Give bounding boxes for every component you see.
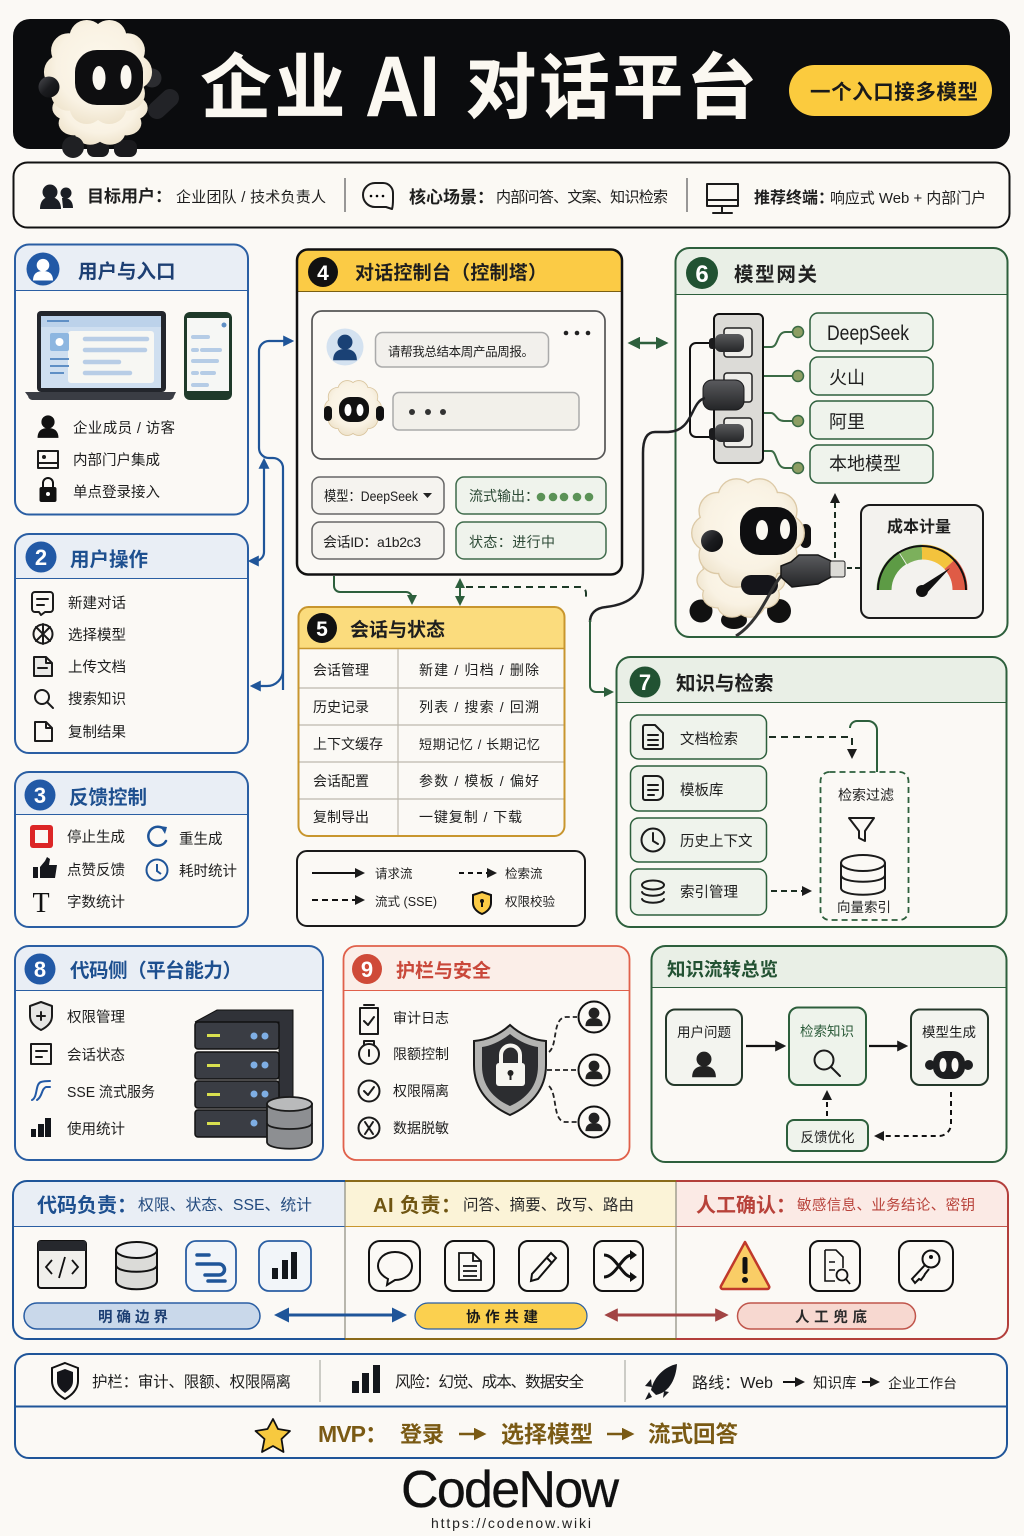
connectors: console to session [334,576,586,604]
subtitle pill: 一个入口接多模型 [810,81,978,104]
capability list [30,1002,155,1138]
icon: shield [473,892,491,914]
panel 3: feedback controls: 字数统计 [67,894,125,911]
icon: session state [31,1044,51,1064]
panel 3: feedback controls [15,772,248,927]
arrow: blue [277,1314,404,1316]
heading: 知识流转总览 [667,959,778,980]
legend: 权限校验 [505,894,556,909]
column headings: 人工确认： [696,1194,796,1217]
chip: streaming: 流式输出： [469,488,539,504]
safety list: 权限隔离 [393,1083,449,1099]
badge 2 [26,542,56,572]
panel 4: chat console [297,249,622,574]
safety list: 限额控制 [393,1046,449,1062]
panel 3: feedback controls: 重生成 [179,831,222,848]
cost gauge: 成本计量 [887,517,951,536]
badge 9 [352,954,382,984]
badge 9: 9 [361,957,373,982]
retrieval connectors [769,721,877,891]
table rows: 上下文缓存 [313,736,383,752]
flow arrows [746,1046,951,1136]
safety list: 审计日志 [393,1010,449,1026]
model chips [810,313,933,483]
icon: thumbs up [33,857,57,878]
badge 8: 8 [34,957,46,982]
model connectors [763,332,799,468]
legend: 流式 (SSE) [375,895,437,909]
action list: 选择模型 [68,627,126,644]
target users [87,186,326,206]
icon: user badge [26,252,60,286]
table rows: 参数 / 模板 / 偏好 [419,773,539,789]
column headings: 权限、状态、SSE、统计 [138,1196,312,1214]
title: 对话平台 [466,49,760,127]
box: model generation [911,1010,988,1085]
icon: lock [40,478,56,502]
route: 企业工作台 [888,1375,957,1391]
core scenarios: 核心场景： [409,187,494,207]
retrieval filter box: 检索过滤 [838,787,894,803]
badge 6: 6 [695,261,709,288]
icon: power strip [690,314,763,463]
action list: 复制结果 [68,723,126,741]
route: 知识库 [813,1375,856,1392]
title: AI [365,39,440,135]
chip: status: 状态：进行中 [469,534,555,550]
cable arrow to retrieval [590,620,612,692]
icon: server rack [195,1010,312,1149]
route: 路线：Web [692,1374,773,1392]
capability list: 会话状态 [67,1047,125,1064]
table rows: 列表 / 搜索 / 回溯 [419,699,539,715]
chat window [312,311,605,459]
icon: code window [38,1241,86,1288]
model chips: DeepSeek [827,322,909,345]
icon: star [256,1419,290,1452]
title [201,39,760,135]
icon: users [40,184,73,209]
icon: model select [34,624,52,644]
icon: quota [359,1041,379,1064]
risks: 风险：幻觉、成本、数据安全 [395,1373,584,1391]
icon: template [643,776,663,800]
icon: guard shield [52,1363,78,1399]
assistant message [393,392,579,430]
icon: upload doc [34,657,52,676]
icon: sheep holding plug [690,479,845,636]
heading: 对话控制台（控制塔） [355,261,547,284]
black cable [590,398,705,622]
box: model generation: 模型生成 [922,1025,976,1040]
badge 8 [24,954,56,984]
heading: 用户与入口 [78,260,176,283]
retrieval filter box [820,772,908,920]
icon: users [578,1002,610,1138]
core scenarios [409,187,668,207]
logo: CodeNow: CodeNow [401,1461,619,1519]
icon: document [445,1241,494,1291]
panel: responsibility matrix [13,1181,1008,1339]
chip: session id: 会话ID：a1b2c3 [323,534,421,550]
pill: clear boundary [24,1303,260,1329]
chip: status [456,522,606,559]
column headings: 问答、摘要、改写、路由 [463,1196,634,1214]
connector: panels 1-3 to console [250,341,292,690]
icon: portal [38,451,58,468]
icon: funnel [849,818,874,841]
MVP path: 流式回答 [648,1422,739,1447]
icon: new chat [32,592,53,615]
capability list: SSE 流式服务 [67,1084,155,1101]
action list: 新建对话 [68,595,126,612]
icon: SSE stream [32,1081,50,1100]
table rows: 历史记录 [313,699,369,715]
panel 1: users and entry [15,244,248,514]
badge 6 [686,257,718,289]
heading: 模型网关 [734,263,817,286]
icon: stream [186,1241,236,1291]
panel 2: user actions [15,534,248,753]
knowledge chips: 索引管理 [680,884,738,901]
target users: 目标用户： [87,186,172,206]
icon: document [643,725,663,749]
panel: knowledge flow overview [652,946,1006,1162]
badge 7: 7 [639,670,651,695]
icon: isolation check [358,1080,380,1102]
panel 9: guardrails and security [344,946,630,1160]
badge 2: 2 [35,545,47,570]
legend: 检索流 [505,866,543,881]
URL: https://codenow.wiki [431,1515,591,1531]
icon: monitor [707,184,738,213]
route [692,1374,957,1392]
icon: database [841,855,885,895]
heading: 用户操作 [70,548,148,571]
column headings: 代码负责： [37,1194,137,1217]
action list: 搜索知识 [68,691,126,708]
entry list: 企业成员 / 访客 [73,419,175,437]
badge 4 [308,257,338,287]
knowledge chips: 模板库 [680,781,724,799]
safety list: 数据脱敏 [393,1120,449,1136]
knowledge chips: 文档检索 [680,731,738,748]
badge 3 [24,780,56,810]
icon: sheep avatar [324,381,384,435]
icon: user avatar [326,328,364,366]
icon: chat [363,183,393,209]
dashed connectors [835,495,861,568]
icon: rocket [645,1364,677,1400]
core scenarios: 内部问答、文案、知识检索 [496,188,668,206]
terminals: 响应式 Web + 内部门户 [830,189,986,207]
icon: statistics [259,1241,311,1291]
table rows [313,662,540,825]
box: retrieve knowledge [789,1008,866,1085]
pill: human fallback [738,1303,916,1329]
icon: clock [642,828,664,852]
user message [376,332,548,367]
icon: index [642,880,664,903]
MVP path [318,1421,739,1447]
column headings: 敏感信息、业务结论、密钥 [797,1197,975,1214]
pill: co-build [415,1303,587,1329]
icon: stop [30,825,53,848]
box: user question: 用户问题 [677,1024,731,1040]
panel 3: feedback controls: 耗时统计 [179,863,237,880]
terminals: 推荐终端： [754,189,834,207]
pill: human fallback: 人工兜底 [795,1308,868,1326]
retrieval filter box: 向量索引 [837,900,891,915]
panel: roadmap and MVP [15,1354,1007,1458]
heading: 护栏与安全 [396,959,491,982]
icon: key [899,1241,953,1291]
icon: laptop [25,311,176,400]
box: retrieve knowledge: 检索知识 [800,1023,854,1039]
panel 5: session and state [298,607,564,836]
table rows: 新建 / 归档 / 删除 [419,662,539,678]
icon: shield with lock [474,1025,546,1115]
icon: router shuffle [594,1241,643,1291]
action list [32,592,126,741]
entry list [38,415,175,502]
title banner [13,19,1010,149]
heading: 会话与状态 [350,618,445,641]
MVP path: MVP： [318,1421,388,1447]
panel 3: feedback controls: 点赞反馈 [67,862,125,879]
badge 7 [630,666,660,698]
target users: 企业团队 / 技术负责人 [176,188,326,206]
icon: audit log [360,1005,378,1034]
icon: masking [358,1118,380,1138]
icon: timer [146,860,168,880]
panel 8: code side [15,946,323,1160]
arrow: red [607,1314,726,1316]
icon: risk bars [352,1365,380,1393]
action list: 上传文档 [68,659,126,676]
chip: streaming [456,477,606,514]
entry list: 单点登录接入 [73,484,160,501]
table rows: 会话配置 [313,773,369,789]
box: user question [666,1010,742,1085]
badge 3: 3 [34,783,46,808]
dashed user links [547,1017,578,1122]
icon: warning [721,1242,769,1289]
model chips: 阿里 [829,412,865,432]
heading: 知识与检索 [676,672,774,695]
badge 4: 4 [317,262,329,285]
panel 3: feedback controls: 停止生成 [67,829,125,846]
badge 5: 5 [316,618,328,641]
pill: clear boundary: 明确边界 [98,1309,168,1326]
info bar [14,162,1010,228]
box: feedback: 反馈优化 [800,1130,854,1145]
table rows: 会话管理 [313,662,369,678]
icon: usage bars [31,1118,51,1137]
icon: pencil [519,1241,568,1291]
legend: 请求流 [375,867,413,881]
icon: database [116,1242,157,1289]
table rows: 一键复制 / 下载 [419,809,522,825]
heading: 代码侧（平台能力） [70,959,242,982]
column headings [37,1194,975,1217]
panel 6: model gateway [590,248,1008,692]
icon: member [38,415,58,438]
legend [297,851,585,926]
chip: model [312,477,444,514]
icon: document review [810,1241,860,1291]
pill: co-build: 协作共建 [466,1308,538,1326]
badge 5 [307,613,337,643]
table rows: 复制导出 [313,809,369,825]
MVP path: 登录 [400,1422,444,1447]
model chips: 本地模型 [829,454,901,474]
connector: console to gateway [630,342,666,344]
knowledge chips [630,715,766,915]
icon: copy [35,722,52,741]
icon: regenerate [148,826,167,846]
column headings: AI 负责： [373,1194,461,1217]
chip: model: 模型：DeepSeek [324,488,419,504]
heading: 反馈控制 [69,786,147,809]
title: 企业 [201,49,349,127]
safety list [358,1005,449,1138]
icon: sheep mascot [38,20,170,158]
model chips: 火山 [829,368,865,388]
cost gauge [861,505,983,618]
subtitle pill [789,65,992,116]
capability list: 权限管理 [67,1009,125,1026]
icon: shield plus [30,1002,52,1030]
box: feedback [787,1120,868,1151]
user message: 请帮我总结本周产品周报。 [388,344,534,359]
entry list: 内部门户集成 [73,452,160,469]
guardrails: 护栏：审计、限额、权限隔离 [92,1373,291,1391]
icon: chat [369,1241,420,1291]
MVP path: 选择模型 [501,1421,593,1447]
chip: session id [312,522,444,559]
panel 7: knowledge and retrieval [616,657,1006,927]
capability list: 使用统计 [67,1121,125,1138]
icon: text: T [32,888,50,919]
terminals [754,189,986,207]
icon: search [35,690,53,708]
icon: phone [184,312,232,400]
knowledge chips: 历史上下文 [680,833,753,850]
table rows: 短期记忆 / 长期记忆 [419,737,540,752]
